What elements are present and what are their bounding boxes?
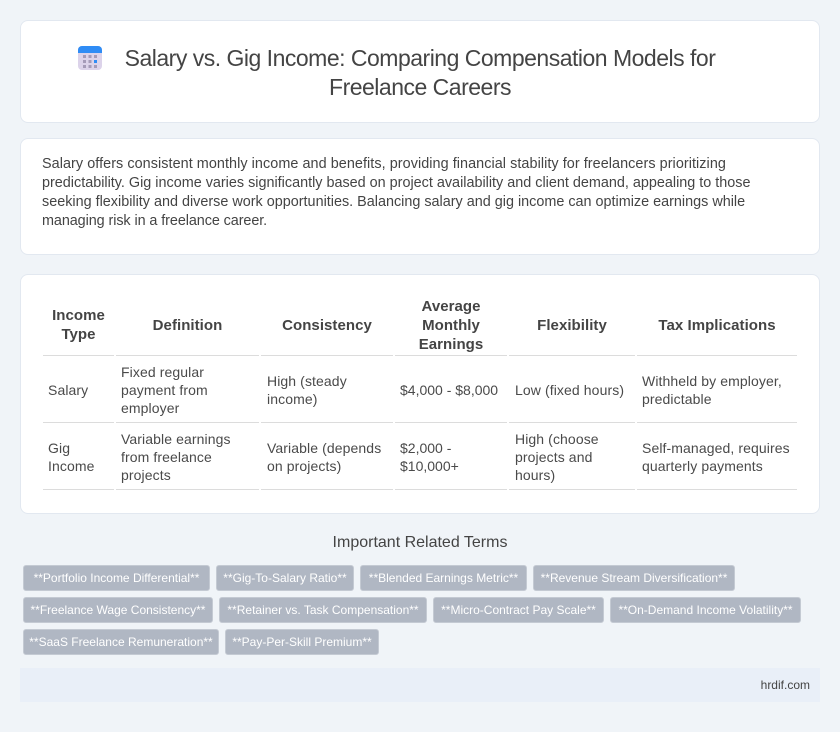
header: income type: Income bbox=[52, 307, 105, 324]
header: income type bbox=[52, 307, 105, 343]
tag bbox=[610, 597, 801, 623]
tag bbox=[23, 597, 213, 623]
gig consistency: Variable (depends bbox=[267, 440, 381, 456]
salary definition bbox=[121, 364, 208, 416]
row: gig income bbox=[48, 440, 95, 474]
panel: summary card bbox=[20, 138, 820, 255]
tag bbox=[216, 565, 354, 591]
salary tax: Withheld by employer, bbox=[642, 373, 782, 389]
footer bar bbox=[20, 668, 820, 702]
gig definition: from freelance bbox=[121, 449, 212, 465]
summary text: predictability. Gig income varies significantly based on project availability and client demand, appealing to those bbox=[42, 175, 750, 191]
gig flexibility bbox=[515, 431, 599, 483]
gig tax: Self-managed, requires bbox=[642, 440, 790, 456]
summary text: managing risk in a freelance career. bbox=[42, 213, 267, 229]
gig consistency: on projects) bbox=[267, 458, 341, 474]
title bbox=[125, 45, 716, 100]
salary definition: payment from bbox=[121, 382, 208, 398]
salary consistency: High (steady bbox=[267, 373, 347, 389]
header: average monthly earnings: Monthly bbox=[422, 317, 480, 334]
header: income type: Type bbox=[61, 326, 96, 343]
header: tax implications: Tax Implications bbox=[658, 317, 776, 334]
salary consistency bbox=[267, 373, 347, 407]
tag: **Gig-To-Salary Ratio** bbox=[223, 571, 347, 585]
summary text bbox=[42, 156, 750, 229]
tag: **On-Demand Income Volatility** bbox=[618, 603, 793, 617]
summary text: seeking flexibility and diverse work opportunities. Balancing salary and gig income can optimize earnings while bbox=[42, 194, 745, 210]
icon: calendar bbox=[78, 46, 102, 70]
title: Salary vs. Gig Income: Comparing Compensation Models for bbox=[125, 45, 715, 71]
tag: **Retainer vs. Task Compensation** bbox=[227, 603, 419, 617]
tag bbox=[219, 597, 427, 623]
tag bbox=[23, 565, 210, 591]
heading: important related terms: Important Related Terms bbox=[333, 534, 507, 551]
tag: **Portfolio Income Differential** bbox=[34, 571, 199, 585]
tag bbox=[225, 629, 379, 655]
row: salary: Salary bbox=[48, 382, 88, 398]
salary definition: employer bbox=[121, 400, 179, 416]
gig flexibility: High (choose bbox=[515, 431, 599, 447]
gig consistency bbox=[267, 440, 381, 474]
tag: **Micro-Contract Pay Scale** bbox=[441, 603, 596, 617]
row: gig income: Gig bbox=[48, 440, 70, 456]
related term tags bbox=[23, 565, 801, 655]
gig earnings bbox=[400, 440, 459, 474]
salary earnings: $4,000 - $8,000 bbox=[400, 382, 498, 398]
header: average monthly earnings: Average bbox=[422, 298, 480, 315]
summary text: Salary offers consistent monthly income and benefits, providing financial stability for freelancers prioritizing bbox=[42, 156, 726, 172]
tag bbox=[360, 565, 527, 591]
tag: **Pay-Per-Skill Premium** bbox=[232, 635, 372, 649]
salary definition: Fixed regular bbox=[121, 364, 204, 380]
gig tax bbox=[642, 440, 790, 474]
row: gig income: Income bbox=[48, 458, 95, 474]
tag bbox=[433, 597, 604, 623]
header: average monthly earnings: Earnings bbox=[419, 336, 483, 353]
title: Freelance Careers bbox=[329, 74, 511, 100]
gig definition: projects bbox=[121, 467, 171, 483]
gig definition: Variable earnings bbox=[121, 431, 231, 447]
tag: **SaaS Freelance Remuneration** bbox=[29, 635, 213, 649]
gig earnings: $2,000 - bbox=[400, 440, 451, 456]
gig flexibility: projects and bbox=[515, 449, 592, 465]
tag: **Freelance Wage Consistency** bbox=[30, 603, 205, 617]
footer source text: hrdif.com bbox=[761, 678, 810, 692]
header: flexibility: Flexibility bbox=[537, 317, 607, 334]
comparison table bbox=[43, 298, 797, 490]
salary tax bbox=[642, 373, 782, 407]
gig tax: quarterly payments bbox=[642, 458, 763, 474]
tag: **Blended Earnings Metric** bbox=[369, 571, 518, 585]
panel: comparison table card bbox=[20, 274, 820, 514]
gig earnings: $10,000+ bbox=[400, 458, 459, 474]
salary consistency: income) bbox=[267, 391, 318, 407]
salary tax: predictable bbox=[642, 391, 712, 407]
tag bbox=[533, 565, 735, 591]
header: average monthly earnings bbox=[419, 298, 483, 353]
salary flexibility: Low (fixed hours) bbox=[515, 382, 624, 398]
header: consistency: Consistency bbox=[282, 317, 372, 334]
gig flexibility: hours) bbox=[515, 467, 555, 483]
panel: header card bbox=[20, 20, 820, 123]
header: definition: Definition bbox=[153, 317, 222, 334]
tag: **Revenue Stream Diversification** bbox=[541, 571, 727, 585]
tag bbox=[23, 629, 219, 655]
gig definition bbox=[121, 431, 231, 483]
